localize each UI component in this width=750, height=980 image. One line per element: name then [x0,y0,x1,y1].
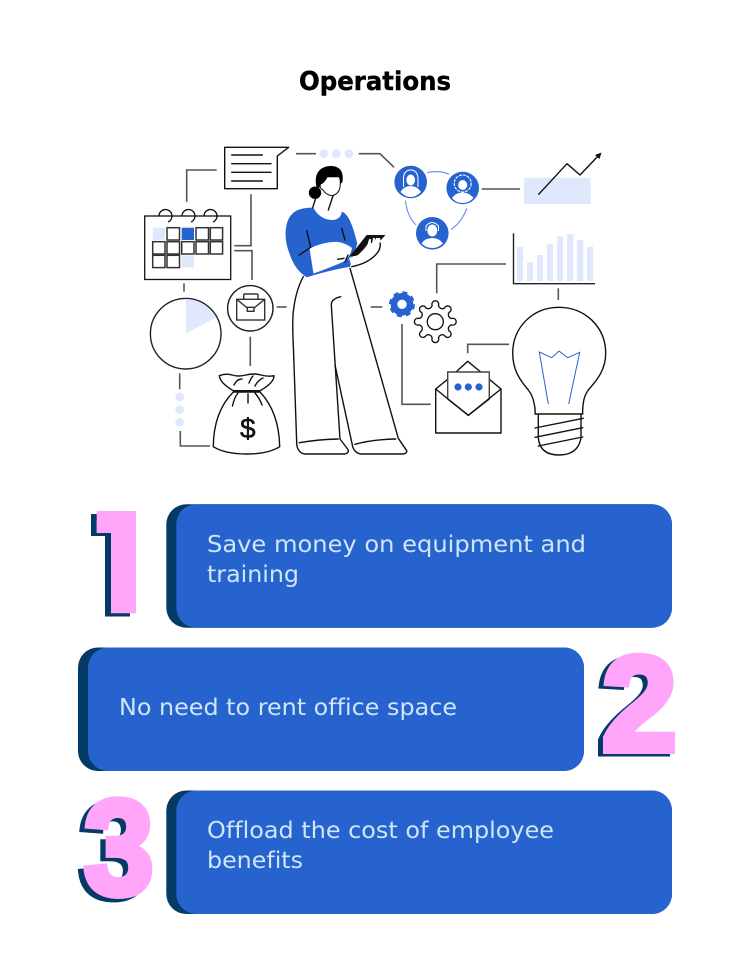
blue gear [390,293,414,316]
icon: speech document [225,147,289,189]
card background [166,504,672,628]
avatar 3 [416,217,449,250]
icon: envelope [436,361,501,433]
card text: Offload the cost of employee [207,816,554,844]
sweater folds [299,228,348,262]
icon: money bag: $ [240,413,256,444]
panel: item 2 [78,648,584,771]
icon: money bag [213,374,280,454]
outline gear [414,301,456,343]
dots left [175,393,184,427]
panel: item 3: benefits [207,846,303,874]
number 3: 3 [84,772,154,923]
hair [316,166,343,191]
forearm [310,242,352,274]
icon: light bulb [513,307,606,455]
avatar 2 [446,172,479,204]
icon: growth arrow [524,152,602,204]
icon: calendar [145,209,231,280]
number 2: 2 [602,628,677,780]
bar chart [514,233,595,284]
dots top [319,149,353,158]
icon: briefcase [228,286,273,331]
number 3: 3 [78,775,148,926]
figure: woman with tablet [286,166,407,454]
avatar 1 [394,166,427,198]
card text: No need to rent office space [119,693,457,721]
card background [166,790,672,914]
neck [313,195,333,210]
connector lines [180,154,558,446]
card text: Save money on equipment and [207,530,586,558]
icon: team network [394,166,479,250]
illustration: operations scene [145,147,606,455]
number 1: 1 [74,481,155,644]
card background [78,648,584,771]
sweater [286,208,357,277]
trousers [293,268,407,454]
panel: item 3 [166,790,672,914]
number 1: 1 [68,484,149,647]
panel: item 1 [166,504,672,628]
number 2: 2 [597,631,672,782]
icon: pie chart [150,298,221,369]
panel: item 1: training [207,560,299,588]
hand and tablet [349,235,386,268]
title: Operations [299,67,451,97]
bun [309,186,321,199]
face [320,177,340,196]
number 1 [91,511,136,616]
